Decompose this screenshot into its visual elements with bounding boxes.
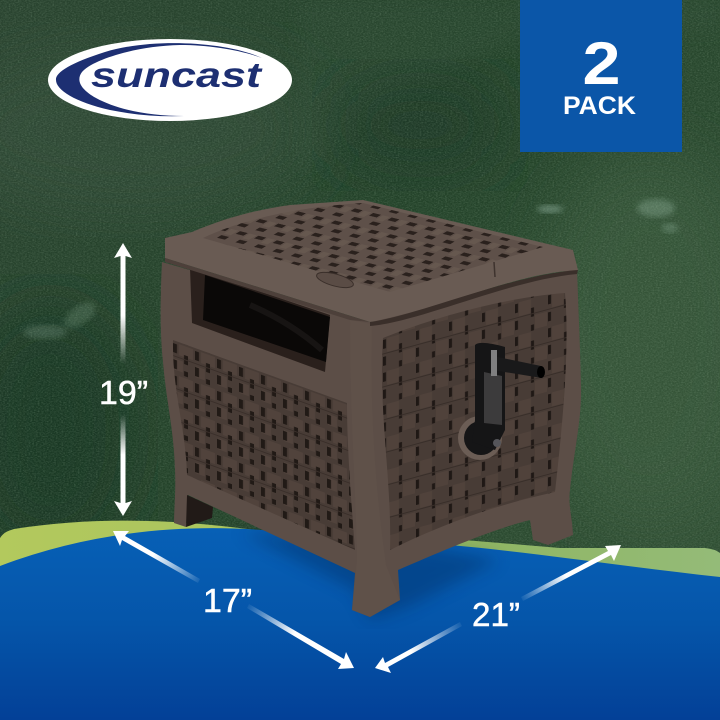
blue floor [0,528,720,720]
left foot interior [186,495,213,527]
arrow: width 21 [375,545,621,673]
front corner post [350,320,400,617]
label: 19 inches: 19” [99,374,148,411]
body silhouette [161,262,581,617]
weave: left face [173,340,355,550]
label: 17 inches: 17” [203,582,252,619]
crank handle [458,343,545,460]
arrow: depth 17 [113,531,354,669]
logo: suncast [48,39,292,121]
lid badge [315,269,355,291]
arrow: height 19 [114,243,132,516]
badge: 2 pack: PACK [563,92,636,120]
logo: suncast: suncast [91,56,263,95]
badge: 2 pack: 2 [582,30,620,97]
green band left [0,521,262,580]
weave: right face [382,293,567,550]
product: hose reel box [161,200,581,617]
lid [165,200,578,326]
weave: lid top [203,203,543,292]
product shadow [240,532,500,620]
badge: 2 pack [520,0,682,152]
green band right [440,538,720,590]
label: 21 inches: 21” [472,596,520,633]
hose window [190,268,330,372]
